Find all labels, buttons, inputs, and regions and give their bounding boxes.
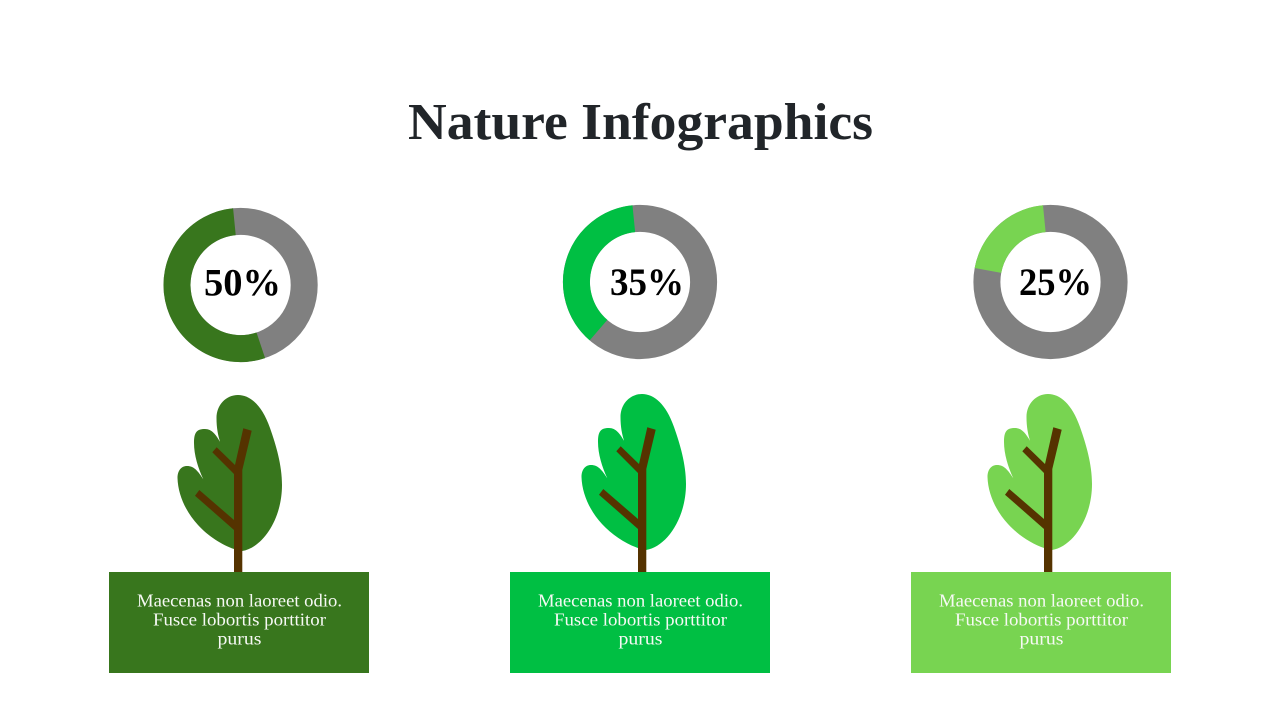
text box: dark green: Fusce lobortis porttitor: [153, 610, 326, 630]
icon: tree light green: [988, 394, 1092, 574]
icon: tree dark green: [178, 395, 282, 575]
text box: dark green: [109, 572, 369, 673]
text box: medium green: Fusce lobortis porttitor: [554, 610, 727, 630]
text box: dark green: Maecenas non laoreet odio.: [137, 590, 342, 610]
text box: dark green: purus: [218, 628, 262, 648]
value: 35%: 35%: [610, 261, 684, 304]
donut chart: 50%: [177, 221, 304, 349]
text box: light green: Fusce lobortis porttitor: [955, 610, 1128, 630]
donut chart: 35%: [576, 218, 704, 346]
panel: 35% column: [510, 218, 770, 673]
panel: 25% column: [911, 218, 1171, 673]
value: 25%: 25%: [1019, 261, 1092, 304]
icon: tree medium green: [582, 394, 686, 574]
text box: light green: Maecenas non laoreet odio.: [939, 590, 1144, 610]
text box: medium green: Maecenas non laoreet odio.: [538, 590, 743, 610]
text box: light green: [911, 572, 1171, 673]
donut chart: 25%: [987, 218, 1114, 346]
panel: 50% column: [109, 221, 369, 673]
value: 50%: 50%: [204, 262, 281, 304]
title: Nature Infographics: [408, 94, 873, 151]
text box: light green: purus: [1020, 628, 1064, 648]
text box: medium green: purus: [618, 628, 663, 648]
text box: medium green: [510, 572, 770, 673]
